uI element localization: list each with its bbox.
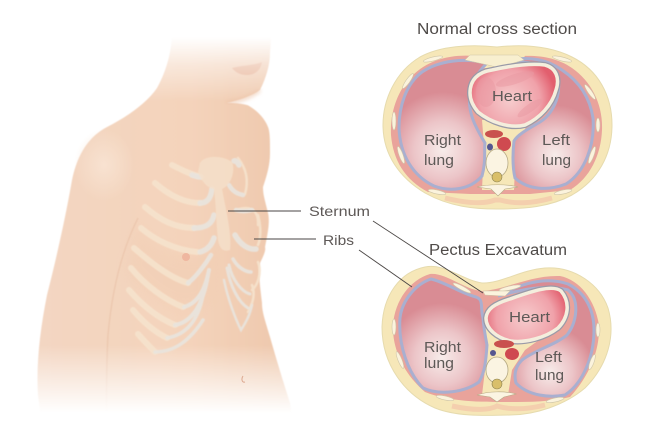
- leader line: ribs to pectus section: [359, 250, 412, 287]
- jaw shadow: [227, 90, 260, 103]
- label: Sternum: Sternum: [309, 203, 370, 219]
- arm crease: [106, 218, 138, 367]
- label: Left: Left: [542, 132, 571, 149]
- panel: pectus excavatum cross section: [382, 266, 611, 415]
- heading: Normal cross section: Normal cross section: [417, 21, 577, 38]
- ribs: [392, 55, 600, 196]
- illustration: torso with rib cage: [37, 42, 290, 406]
- sternum: [198, 157, 233, 251]
- heart: [486, 288, 567, 341]
- heart sac: [486, 288, 567, 341]
- infographic: pectus excavatum anatomy: [37, 22, 612, 416]
- heart sac: [470, 64, 558, 126]
- label: lung (left): lung: [535, 367, 564, 384]
- leader line: sternum to pectus section: [373, 221, 483, 293]
- label: Right lung: Right: [424, 132, 462, 149]
- muscle ring: [391, 56, 602, 194]
- ribs: [392, 282, 600, 404]
- rib bones: [129, 158, 260, 352]
- left lung: [510, 58, 593, 188]
- chest shadow: [125, 225, 215, 308]
- right lung: [400, 279, 487, 392]
- label: Left: Left: [535, 349, 563, 366]
- muscle ring: [393, 274, 599, 402]
- label: lung (right): lung: [424, 152, 454, 169]
- lips: [232, 62, 262, 75]
- heading: Pectus Excavatum: Pectus Excavatum: [429, 242, 567, 259]
- panel: normal cross section: [383, 46, 612, 209]
- vessels and spine: [445, 130, 552, 203]
- body wall: [382, 266, 611, 415]
- leader line: sternum: [228, 210, 301, 212]
- heart chambers: [476, 68, 545, 120]
- torso skin: [37, 42, 290, 406]
- label: Right: Right: [424, 339, 462, 356]
- sternum: [465, 55, 524, 68]
- label: Ribs: Ribs: [323, 232, 354, 248]
- costal cartilage: [155, 161, 256, 352]
- left lung: [498, 281, 594, 396]
- label: lung (right): lung: [424, 355, 454, 372]
- vessels and spine: [452, 340, 545, 409]
- sternum: [483, 291, 510, 296]
- heart: [470, 64, 558, 126]
- mediastinum: [480, 320, 560, 395]
- label: Heart: Heart: [509, 309, 551, 326]
- leader line: ribs: [254, 238, 316, 240]
- label: lung (left): lung: [542, 152, 571, 169]
- right lung: [399, 60, 487, 189]
- label: Heart: Heart: [492, 88, 533, 105]
- body wall: [383, 46, 612, 209]
- navel and nipple: [182, 254, 245, 382]
- shoulder highlight: [88, 145, 121, 185]
- mediastinum: [468, 54, 530, 190]
